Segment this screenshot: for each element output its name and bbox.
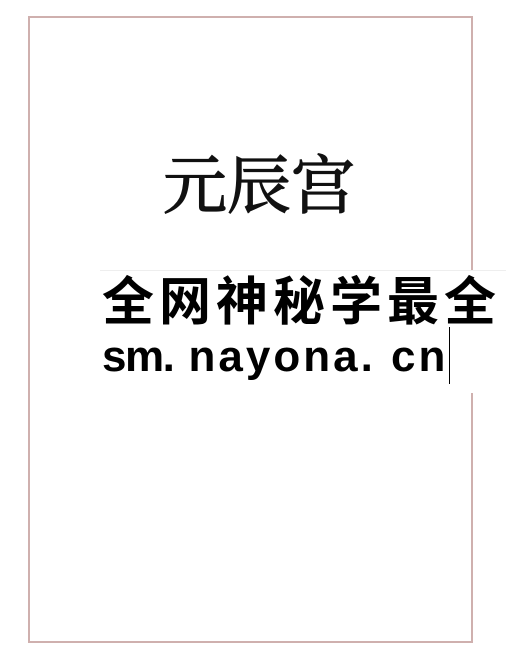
watermark panel — [100, 270, 506, 393]
watermark heading: 全网神秘学最全 — [102, 260, 501, 335]
title: 元辰宫 — [163, 135, 355, 227]
text cursor — [449, 327, 450, 384]
watermark url: sm. nayona. cn — [102, 332, 448, 381]
